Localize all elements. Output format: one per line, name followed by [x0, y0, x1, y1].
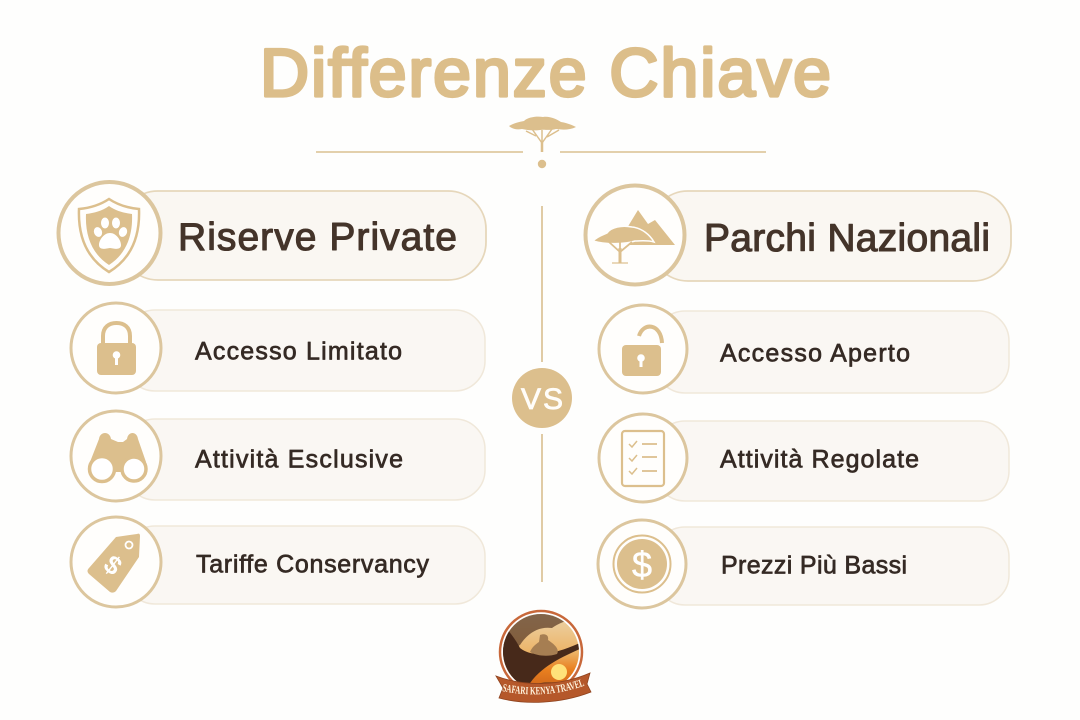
logo: Safari Kenya Travel badge: [495, 610, 592, 703]
icon: price tag: [88, 534, 140, 593]
icon: open padlock: [622, 327, 662, 376]
panel: Tariffe Conservancy row: Tariffe Conservancy: [196, 550, 430, 578]
panel: Accesso Limitato row: Accesso Limitato: [195, 338, 402, 366]
title ornament: acacia tree and divider: [316, 117, 766, 168]
icon: price tag: $: [98, 549, 128, 582]
panel: Parchi Nazionali header: Parchi Nazionali: [704, 217, 990, 260]
panel: Accesso Aperto row: [599, 305, 1009, 393]
panel: Attività Regolate row: Attività Regolate: [720, 446, 919, 474]
title: Differenze Chiave: [260, 35, 831, 111]
icon: binoculars: [90, 433, 146, 482]
icon: checklist: [622, 431, 664, 486]
icon: shield with paw: [79, 199, 139, 272]
panel: Tariffe Conservancy row: [71, 517, 485, 607]
icon: acacia tree and mountains: [593, 210, 675, 263]
panel: Attività Esclusive row: [71, 411, 485, 501]
panel: Attività Esclusive row: Attività Esclusive: [195, 446, 403, 474]
center divider with VS badge: [512, 206, 572, 582]
panel: Prezzi Più Bassi row: [598, 520, 1009, 608]
panel: Parchi Nazionali header: [586, 186, 1011, 284]
panel: Accesso Aperto row: Accesso Aperto: [720, 340, 910, 368]
panel: Accesso Limitato row: [71, 303, 485, 393]
icon: dollar coin: [614, 536, 670, 592]
panel: Attività Regolate row: [599, 414, 1009, 502]
logo: Safari Kenya Travel badge: SAFARI KENYA TRAVEL: [502, 680, 584, 694]
panel: Riserve Private header: Riserve Private: [178, 216, 457, 259]
panel: Riserve Private header: [58, 182, 486, 284]
icon: closed padlock: [97, 323, 136, 375]
panel: Prezzi Più Bassi row: Prezzi Più Bassi: [721, 552, 907, 580]
center divider with VS badge: VS: [521, 383, 563, 416]
icon: dollar coin: $: [632, 544, 652, 585]
